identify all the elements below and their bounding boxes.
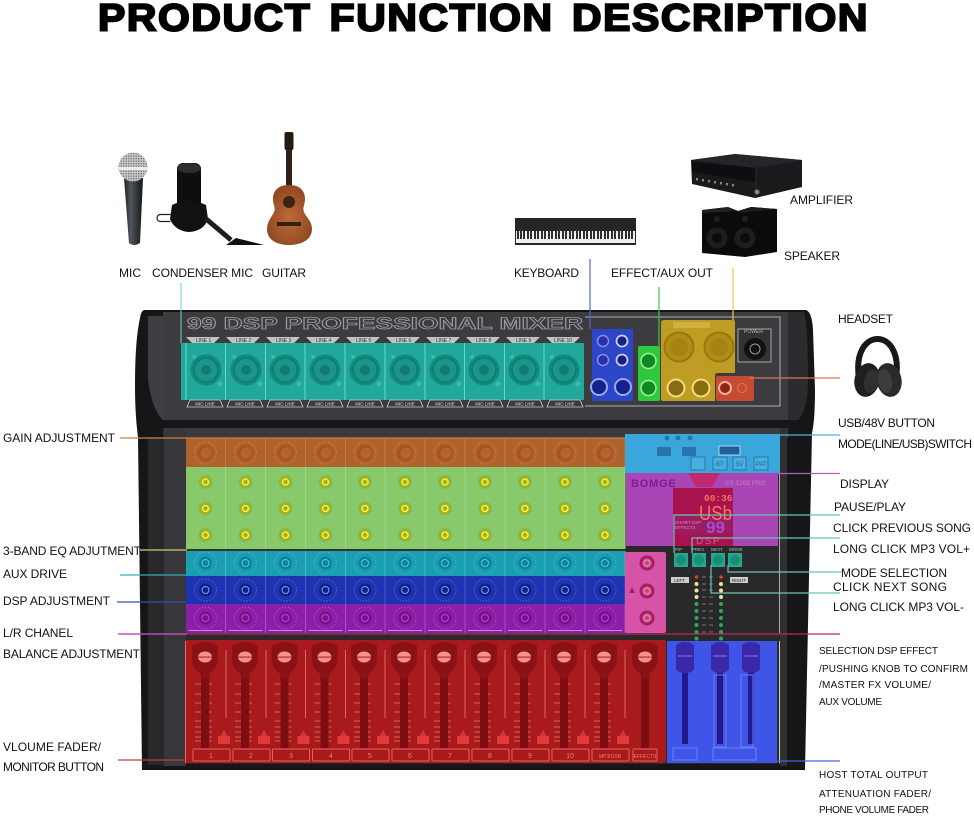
left function labels: VLOUME FADER/ bbox=[3, 740, 102, 754]
panel: USB and mode switches: PAT bbox=[756, 462, 767, 468]
left function labels bbox=[3, 431, 142, 774]
left function labels: GAIN ADJUSTMENT bbox=[3, 431, 116, 445]
top source labels: GUITAR bbox=[262, 266, 306, 280]
panel: mic/line input channels: LINE 9 bbox=[516, 338, 532, 344]
panel: mic/line input channels: LINE 1 bbox=[196, 338, 212, 344]
panel: USB and mode switches bbox=[625, 434, 780, 473]
right function labels: USB/48V BUTTON bbox=[838, 416, 935, 430]
panel: display bbox=[626, 473, 778, 547]
level meter: RIGHT bbox=[732, 578, 746, 583]
panel: rec out / line output jacks bbox=[591, 329, 633, 401]
panel: channel faders: MP3/USB bbox=[599, 754, 622, 760]
panel: three band EQ row bbox=[186, 467, 625, 549]
panel: channel faders: 7 bbox=[448, 753, 452, 760]
panel: mic/line input channels: MIC LINE bbox=[515, 402, 535, 406]
connector lines bbox=[117, 259, 842, 761]
panel: display: CT-1202 PRO bbox=[725, 480, 766, 487]
output device labels: AMPLIFIER bbox=[790, 193, 853, 207]
icon: condenser microphone bbox=[157, 163, 264, 245]
panel: display: BOMGE bbox=[631, 478, 677, 490]
panel: transport buttons: PREV bbox=[692, 547, 704, 552]
panel: mic/line input channels: MIC LINE bbox=[355, 402, 375, 406]
output device labels bbox=[784, 193, 894, 326]
panel: mic/line input channels: LINE 2 bbox=[236, 338, 252, 344]
mixer body bbox=[135, 310, 815, 770]
panel: channel faders: 8 bbox=[488, 753, 492, 760]
top source labels: EFFECT/AUX OUT bbox=[611, 266, 714, 280]
panel: channel faders: EFFECTS bbox=[634, 754, 657, 760]
panel: mic/line input channels: LINE 5 bbox=[356, 338, 372, 344]
right function labels: PAUSE/PLAY bbox=[834, 500, 906, 514]
DSP and master fader notes: SELECTION DSP EFFECT bbox=[819, 646, 938, 657]
DSP and master fader notes: PHONE VOLUME FADER bbox=[819, 805, 929, 816]
right function labels: LONG CLICK MP3 VOL+ bbox=[833, 542, 970, 556]
output device labels: HEADSET bbox=[838, 312, 894, 326]
DSP and master fader notes: AUX VOLUME bbox=[819, 697, 882, 708]
left function labels: AUX DRIVE bbox=[3, 567, 67, 581]
panel: aux drive row bbox=[186, 551, 625, 576]
panel: channel faders: 10 bbox=[566, 753, 574, 760]
left function labels: BALANCE ADJUSTMENT bbox=[3, 647, 141, 661]
panel: mic/line input channels: MIC LINE bbox=[395, 402, 415, 406]
panel: channel faders: 6 bbox=[408, 753, 412, 760]
panel: mic/line input channels: LINE 10 bbox=[554, 338, 572, 344]
right function labels: MODE(LINE/USB)SWITCH bbox=[838, 437, 972, 451]
panel: mic/line input channels: LINE 7 bbox=[436, 338, 452, 344]
left function labels: DSP ADJUSTMENT bbox=[3, 594, 111, 608]
panel: mic/line input channels: MIC LINE bbox=[435, 402, 455, 406]
left function labels: MONITOR BUTTON bbox=[3, 760, 104, 774]
right function labels bbox=[833, 416, 972, 614]
panel: mic/line input channels: MIC LINE bbox=[315, 402, 335, 406]
panel: DSP row bbox=[186, 576, 625, 604]
panel: transport buttons: P/P bbox=[675, 547, 682, 552]
right function labels: MODE SELECTION bbox=[841, 566, 947, 580]
panel: display: 00:36 bbox=[704, 493, 733, 504]
panel: channel faders: 4 bbox=[329, 753, 333, 760]
DSP and master fader notes: ATTENUATION FADER/ bbox=[819, 789, 931, 800]
icon: amplifier bbox=[691, 154, 802, 198]
left function labels: 3-BAND EQ ADJUTMENT bbox=[3, 544, 142, 558]
power button: POWER bbox=[744, 329, 763, 335]
panel: channel faders: 9 bbox=[528, 753, 532, 760]
DSP and master fader notes: /MASTER FX VOLUME/ bbox=[819, 680, 931, 691]
panel: USB and mode switches: 5V bbox=[736, 462, 743, 468]
panel: display: USb bbox=[699, 503, 732, 525]
panel: mic/line input channels: LINE 6 bbox=[396, 338, 412, 344]
level meter: LEFT bbox=[674, 578, 685, 583]
panel: mic/line input channels bbox=[181, 337, 584, 407]
panel: mic/line input channels: MIC LINE bbox=[475, 402, 495, 406]
top source labels: MIC bbox=[119, 266, 141, 280]
panel: channel faders: 5 bbox=[368, 753, 372, 760]
panel: transport buttons: NEXT bbox=[711, 547, 723, 552]
right function labels: CLICK PREVIOUS SONG bbox=[833, 521, 971, 535]
panel: phones jack bbox=[716, 376, 754, 401]
right function labels: CLICK NEXT SONG bbox=[833, 580, 947, 594]
output device labels: SPEAKER bbox=[784, 249, 840, 263]
left function labels: L/R CHANEL bbox=[3, 626, 73, 640]
panel: transport buttons: MODE bbox=[729, 547, 742, 552]
channel knobs bbox=[188, 438, 626, 633]
panel: master pink knobs bbox=[625, 552, 666, 633]
panel: mic/line input channels: LINE 4 bbox=[316, 338, 332, 344]
panel: master output faders bbox=[667, 641, 777, 763]
top source labels: KEYBOARD bbox=[514, 266, 579, 280]
panel: display: EFFECTS bbox=[675, 525, 696, 530]
icon: speakers bbox=[702, 207, 777, 257]
panel: balanced speaker outputs bbox=[661, 320, 735, 401]
panel: channel faders: 1 bbox=[209, 753, 213, 760]
top source labels: CONDENSER MIC bbox=[152, 266, 253, 280]
level meter bbox=[671, 575, 748, 640]
panel: mic/line input channels: MIC LINE bbox=[555, 402, 575, 406]
panel: channel faders: 2 bbox=[249, 753, 253, 760]
panel: display: SHORT DSP bbox=[675, 520, 701, 525]
panel: effect / aux out jacks bbox=[638, 346, 660, 401]
top source labels bbox=[119, 266, 714, 280]
right function labels: DISPLAY bbox=[840, 477, 889, 491]
panel: gain row bbox=[186, 438, 625, 467]
DSP and master fader notes: /PUSHING KNOB TO CONFIRM bbox=[819, 664, 968, 675]
panel: display: DSP bbox=[696, 536, 721, 547]
panel: transport buttons bbox=[674, 547, 742, 567]
panel: balance row bbox=[186, 604, 625, 633]
right function labels: LONG CLICK MP3 VOL- bbox=[833, 600, 964, 614]
panel: mic/line input channels: LINE 8 bbox=[476, 338, 492, 344]
DSP and master fader notes bbox=[819, 646, 968, 816]
power button bbox=[738, 329, 771, 362]
panel: mic/line input channels: MIC LINE bbox=[275, 402, 295, 406]
panel: channel faders: 3 bbox=[289, 753, 293, 760]
icon: keyboard bbox=[515, 218, 636, 245]
panel: channel faders bbox=[185, 640, 666, 763]
icon: handheld microphone bbox=[118, 152, 148, 245]
panel: mic/line input channels: MIC LINE bbox=[195, 402, 215, 406]
DSP and master fader notes: HOST TOTAL OUTPUT bbox=[819, 770, 928, 781]
mixer name plate: 99 DSP PROFESSIONAL MIXER bbox=[187, 314, 583, 333]
icon: guitar bbox=[267, 132, 312, 245]
panel: mic/line input channels: MIC LINE bbox=[235, 402, 255, 406]
icon: headset bbox=[851, 339, 905, 399]
panel: USB and mode switches: BT bbox=[716, 462, 724, 468]
panel: display: 99 bbox=[706, 518, 725, 537]
panel: mic/line input channels: LINE 3 bbox=[276, 338, 292, 344]
